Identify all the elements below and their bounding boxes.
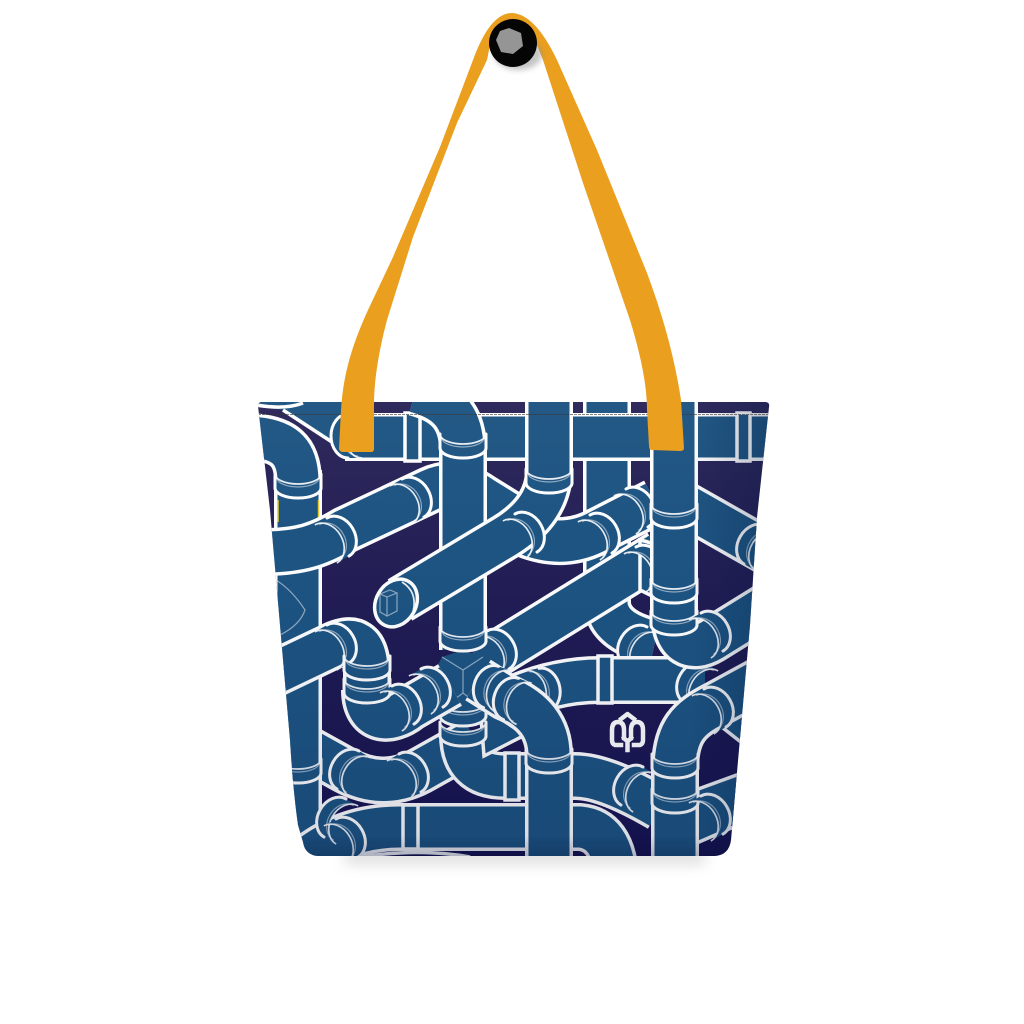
- back wedge: right side: [722, 712, 742, 744]
- left diagonal pipe with elbow: [255, 470, 535, 563]
- bag body with pipe pattern: [258, 402, 770, 856]
- top left elbow: [245, 437, 321, 498]
- bottom right vertical with elbow: [650, 660, 747, 856]
- logo: [612, 714, 643, 750]
- left diagonal to vertical elbow: [265, 616, 367, 700]
- right vertical pipe with elbow: [650, 402, 752, 670]
- hem stitching: [258, 414, 768, 415]
- left vertical pipe: [275, 470, 321, 840]
- tone overlay: [282, 402, 770, 856]
- tote bag product image: [258, 13, 770, 868]
- back pipe: top left diagonal: [258, 402, 342, 444]
- back pipe: right diagonal: [698, 484, 757, 572]
- wedge below cross: [480, 714, 522, 759]
- lower centre elbow: [463, 735, 660, 812]
- back pipe: vertical behind bar with elbow: [607, 395, 659, 672]
- centre vertical pipe with top elbow: [415, 392, 486, 650]
- strap: [339, 13, 684, 452]
- right elbow pipe: [525, 480, 663, 560]
- peg: [489, 19, 537, 67]
- peg shadow: [494, 38, 542, 70]
- long front diagonal to cross: [472, 532, 650, 673]
- lower left back elbow: [300, 740, 475, 799]
- cross fitting: [438, 626, 488, 748]
- back wedge: bottom right: [699, 773, 737, 844]
- bottom horizontal pipe: [300, 796, 637, 856]
- elbow from cross to left: [344, 656, 458, 731]
- front diagonal pipe with end cap: [366, 395, 572, 635]
- middle right horizontal pipe: [512, 654, 718, 709]
- top horizontal bar with rings: [331, 413, 780, 461]
- bag ground shadow: [345, 850, 705, 864]
- front elbow to lower vertical: [468, 661, 572, 870]
